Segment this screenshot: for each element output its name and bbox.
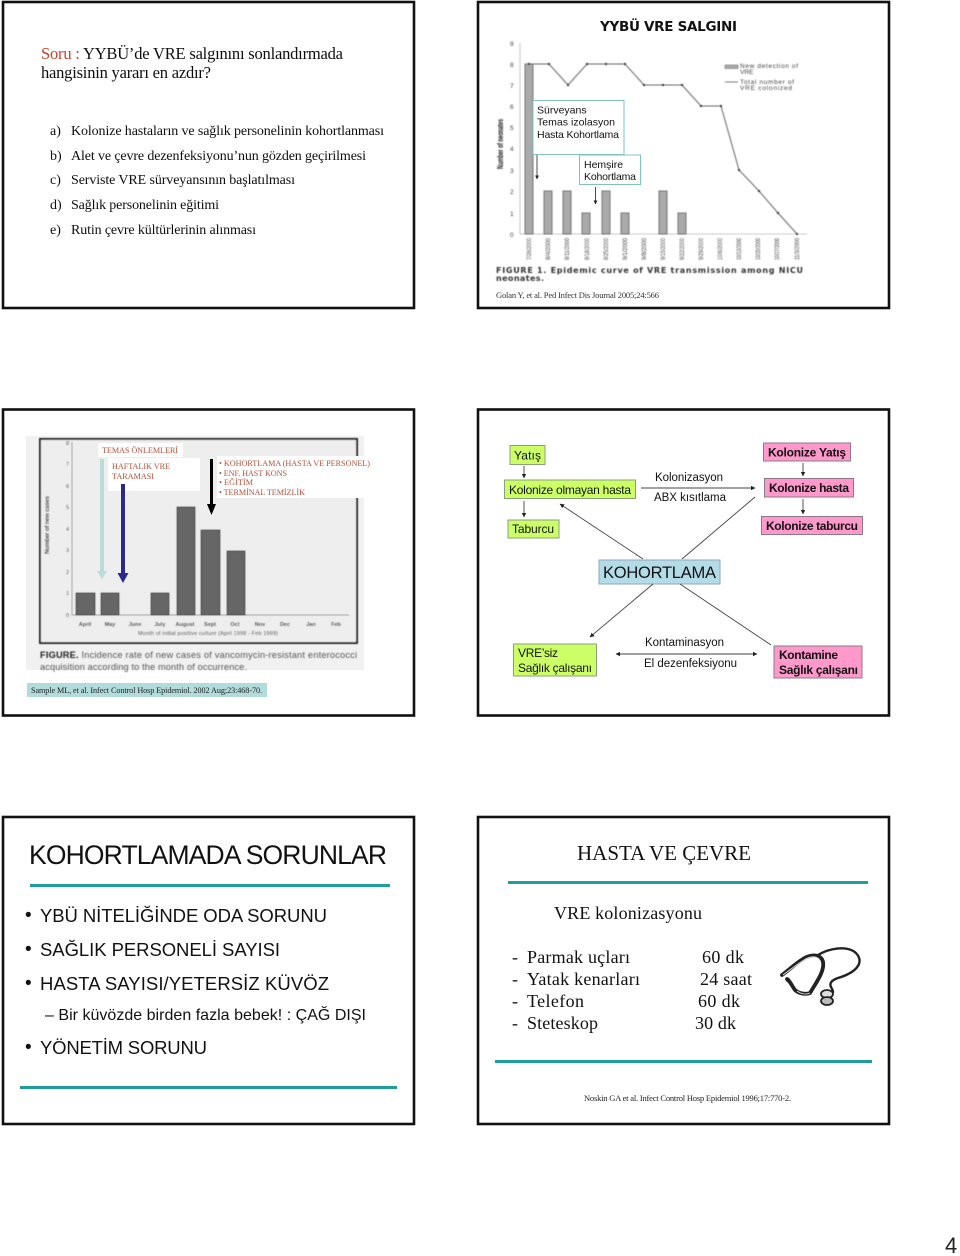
box: colonized patient (764, 478, 854, 497)
duration list: 60 dk (698, 991, 740, 1011)
y axis numbers: 0 (510, 232, 514, 239)
box: contaminated health worker (774, 646, 862, 678)
bullet list: • (25, 939, 32, 960)
labels: contamination: Kontaminasyon (645, 637, 724, 649)
label: cohort measures (217, 456, 373, 498)
box: KOHORTLAMA: KOHORTLAMA (603, 564, 716, 582)
month labels: June (129, 622, 141, 628)
bullet list: YÖNETİM SORUNU (40, 1037, 207, 1058)
duration list: Steteskop (527, 1013, 598, 1033)
date labels: 9/1/2000 (622, 238, 629, 260)
month labels (79, 622, 342, 628)
chart legend: VRE colonized (740, 85, 792, 92)
y axis numbers: 2 (66, 570, 69, 576)
panel: quiz question (3, 2, 414, 308)
y axis numbers: 8 (66, 441, 69, 447)
chart legend: New detection of (740, 63, 798, 70)
duration list: Yatak kenarları (527, 969, 640, 989)
labels: colonization: ABX kısıtlama (654, 492, 727, 504)
citation box (27, 683, 267, 697)
month labels: July (154, 622, 166, 628)
date labels: 8/18/2000 (584, 238, 591, 260)
answer options: Rutin çevre kültürlerinin alınması (71, 223, 256, 238)
slide heading: KOHORTLAMADA SORUNLAR (29, 840, 387, 870)
y axis numbers: 2 (510, 189, 514, 196)
month labels: April (79, 622, 92, 628)
date labels: 8/25/2000 (603, 238, 610, 260)
labels: contamination (644, 637, 737, 670)
box: colonized discharge: Kolonize taburcu (766, 519, 858, 533)
figure caption: FIGURE 1. Epidemic curve of VRE transmission among NICU (496, 266, 803, 275)
icon: stethoscope (782, 948, 860, 1005)
box: VRE-free health worker: Sağlık çalışanı (518, 661, 592, 675)
heading rule (508, 881, 868, 884)
y axis numbers: 5 (510, 125, 514, 132)
duration list: - (512, 969, 518, 989)
callout: surveillance: Sürveyans (537, 104, 587, 116)
citation: Golan Y, et al. Ped Infect Dis Journal 2005;24:566 (496, 290, 659, 300)
date labels: 10/27/2000 (774, 238, 781, 260)
labels: colonization: Kolonizasyon (655, 472, 723, 484)
callout: surveillance (533, 100, 624, 154)
figure caption: FIGURE. Incidence rate of new cases of vancomycin-resistant enterococci (40, 650, 357, 660)
incidence bar chart (40, 439, 357, 672)
callout: surveillance: Temas izolasyon (537, 116, 615, 128)
bars (525, 64, 686, 234)
box: admission: Yatış (514, 448, 541, 462)
date labels: 9/15/2000 (660, 238, 667, 260)
bullet list: HASTA SAYISI/YETERSİZ KÜVÖZ (40, 973, 329, 994)
panel: incidence chart (3, 410, 414, 716)
x axis title: Month of initial positive culture (April 1998 - Feb 1999) (138, 631, 278, 637)
duration list (512, 947, 752, 1033)
date labels: 10/13/2000 (736, 238, 743, 260)
slide heading: YYBÜ VRE SALGINI (599, 17, 737, 35)
date labels: 8/11/2000 (564, 238, 571, 260)
y axis numbers: 7 (66, 462, 69, 468)
answer options: Kolonize hastaların ve sağlık personelinin kohortlanması (71, 124, 384, 139)
box: admission (510, 446, 545, 464)
y axis title: Number of new cases (45, 495, 51, 554)
question heading: hangisinin yararı en azdır? (41, 63, 211, 82)
y axis numbers: 1 (66, 591, 69, 597)
duration list: Parmak uçları (527, 947, 630, 967)
date labels: 9/8/2000 (641, 238, 648, 260)
subheading: VRE kolonizasyonu (554, 903, 702, 923)
y axis numbers: 6 (510, 104, 514, 111)
month labels: Oct (230, 622, 240, 628)
arrow: nurse cohorting start (594, 187, 596, 204)
y axis numbers: 6 (66, 484, 69, 490)
question heading: Soru : YYBÜ’de VRE salgınını sonlandırmada (41, 44, 344, 63)
chart legend: Total number of (740, 79, 794, 86)
y axis numbers (66, 441, 69, 619)
duration list: 30 dk (695, 1013, 736, 1033)
box: non-colonized patient: Kolonize olmayan hasta (509, 483, 631, 497)
box: colonized admission (764, 443, 850, 461)
citation box: Sample ML, et al. Infect Control Hosp Epidemiol. 2002 Aug;23:468-70. (31, 686, 262, 695)
chart legend: VRE (740, 69, 754, 76)
scanned figure background (26, 436, 364, 670)
incidence bar chart: acquisition according to the month of occurrence. (40, 662, 247, 672)
bullet list: YBÜ NİTELİĞİNDE ODA SORUNU (40, 905, 327, 926)
question heading (41, 44, 344, 82)
footer rule (495, 1060, 872, 1063)
callout: nurse cohorting: Hemşire (584, 159, 623, 171)
y axis numbers: 0 (66, 613, 69, 619)
arrows: flow connectors (524, 463, 803, 654)
y axis numbers: 4 (510, 146, 514, 153)
month labels: Dec (280, 622, 290, 628)
month labels: Nov (255, 622, 266, 628)
box: colonized admission: Kolonize Yatış (768, 446, 846, 460)
arrow: contact precautions (97, 459, 107, 579)
bullet list: – Bir küvözde birden fazla bebek! : ÇAĞ DIŞI (45, 1005, 366, 1024)
y axis numbers: 1 (510, 211, 514, 218)
arrow: surveillance start (536, 155, 538, 179)
month labels: Feb (331, 622, 342, 628)
box: contaminated health worker: Sağlık çalışanı (779, 663, 858, 677)
panel: cohorting diagram (478, 410, 889, 716)
answer options: c) (50, 173, 61, 188)
total colonized line (529, 64, 797, 234)
answer options: Sağlık personelinin eğitimi (71, 198, 219, 213)
label: cohort measures: • ENF. HAST KONS (219, 469, 287, 478)
arrow: weekly screening (118, 484, 128, 583)
label: cohort measures: • TERMİNAL TEMİZLİK (219, 488, 305, 497)
date labels: 10/20/2000 (755, 238, 762, 260)
callout: nurse cohorting: Kohortlama (584, 171, 636, 183)
labels: contamination: El dezenfeksiyonu (644, 658, 737, 670)
y axis numbers (510, 41, 514, 239)
answer options (50, 124, 384, 238)
labels: colonization (654, 472, 727, 504)
citation: Noskin GA et al. Infect Control Hosp Epidemiol 1996;17:770-2. (584, 1093, 791, 1103)
duration list: Telefon (527, 991, 584, 1011)
y axis numbers: 3 (66, 548, 69, 554)
bullet list (25, 905, 366, 1058)
answer options: Alet ve çevre dezenfeksiyonu’nun gözden geçirilmesi (71, 149, 366, 164)
date labels: 8/4/2000 (545, 238, 552, 260)
y axis numbers: 3 (510, 168, 514, 175)
date labels: 10/6/2000 (717, 238, 724, 260)
y axis numbers: 4 (66, 527, 69, 533)
box: discharge: Taburcu (512, 522, 554, 536)
answer options: d) (50, 198, 62, 213)
panel: cohorting problems (3, 817, 414, 1124)
duration list: - (512, 1013, 518, 1033)
label: contact precautions: TEMAS ÖNLEMLERİ (102, 446, 178, 455)
bullet list: • (25, 1037, 32, 1058)
y axis numbers: 7 (510, 83, 514, 90)
month labels: May (105, 622, 116, 628)
arrow: cohort measures (207, 459, 216, 515)
label: weekly screening (108, 458, 200, 491)
label: cohort measures: • KOHORTLAMA (HASTA VE PERSONEL) (219, 459, 370, 468)
panel: YYBÜ VRE outbreak (478, 2, 889, 308)
month labels: Sept (204, 622, 216, 628)
y axis numbers: 8 (510, 62, 514, 69)
bars (76, 507, 245, 615)
duration list: - (512, 947, 518, 967)
y axis numbers: 5 (66, 505, 69, 511)
box: VRE-free health worker: VRE’siz (518, 646, 558, 660)
bullet list: • (25, 905, 32, 926)
y axis numbers: 9 (510, 41, 514, 48)
duration list: - (512, 991, 518, 1011)
bullet list: • (25, 973, 32, 994)
answer options: Serviste VRE sürveyansının başlatılması (71, 173, 295, 188)
bullet list: SAĞLIK PERSONELİ SAYISI (40, 939, 280, 960)
label: contact precautions (98, 443, 183, 457)
date labels: 9/29/2000 (698, 238, 705, 260)
y axis title: Number of neonates (496, 119, 505, 169)
box: contaminated health worker: Kontamine (779, 648, 838, 662)
date labels: 9/22/2000 (679, 238, 686, 260)
box: colonized patient: Kolonize hasta (769, 481, 849, 495)
callout: nurse cohorting (580, 155, 640, 184)
answer options: b) (50, 149, 62, 164)
epidemic curve chart: neonates. (496, 274, 544, 283)
box: VRE-free health worker (514, 644, 596, 676)
panel: patient and environment (478, 817, 889, 1124)
date labels (526, 238, 801, 260)
label: weekly screening: HAFTALIK VRE (112, 462, 170, 471)
month labels: Jan (306, 622, 316, 628)
callout: surveillance: Hasta Kohortlama (537, 129, 619, 141)
chart legend (725, 63, 798, 92)
footer rule (20, 1086, 397, 1089)
answer options: a) (50, 124, 61, 139)
date labels: 7/26/2000 (526, 238, 533, 260)
duration list: 60 dk (702, 947, 744, 967)
date labels: 11/3/2000 (794, 238, 801, 260)
label: weekly screening: TARAMASI (112, 472, 154, 481)
box: discharge (508, 520, 559, 538)
month labels: August (176, 622, 195, 628)
heading rule (30, 884, 390, 887)
epidemic curve chart (496, 41, 807, 283)
label: cohort measures: • EĞİTİM (219, 477, 254, 487)
answer options: e) (50, 223, 61, 238)
slide heading: HASTA VE ÇEVRE (577, 841, 751, 865)
duration list: 24 saat (700, 969, 752, 989)
